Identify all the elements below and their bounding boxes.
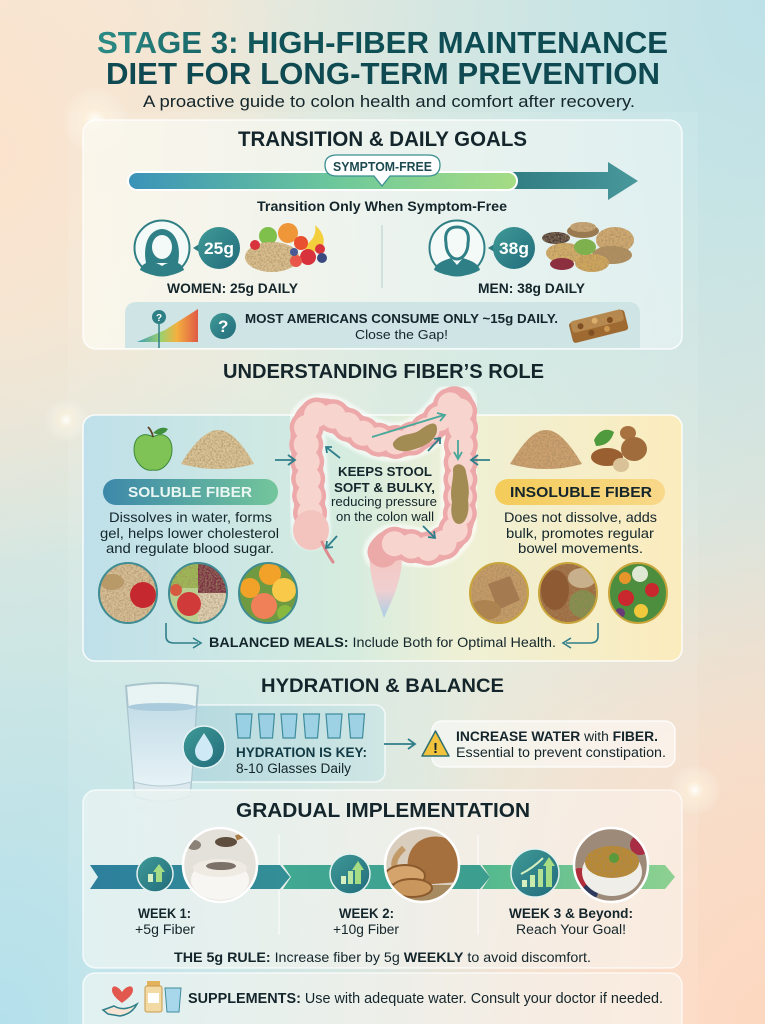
photo: vegetables (609, 563, 667, 623)
ribbon timeline (90, 865, 675, 889)
text: insoluble description: bowel movements. (518, 540, 643, 556)
text: week 2 (333, 906, 400, 937)
title: STAGE 3: HIGH-FIBER MAINTENANCE (97, 25, 668, 60)
title (97, 25, 668, 91)
food: nuts (591, 426, 647, 472)
pill: soluble fiber (103, 479, 278, 505)
text: balanced meals: BALANCED MEALS: Include Both for Optimal Health. (209, 634, 556, 650)
icon: supplement glass (165, 988, 181, 1012)
pill: insoluble fiber: INSOLUBLE FIBER (510, 484, 652, 501)
label: men: MEN: 38g DAILY (478, 281, 585, 296)
text: keeps stool soft (331, 464, 437, 524)
stool: transverse (393, 424, 437, 451)
heading: hydration: HYDRATION & BALANCE (261, 675, 504, 697)
panel: gradual implementation (83, 790, 682, 968)
progress arrow (128, 162, 638, 200)
text: keeps stool soft: reducing pressure (331, 494, 437, 509)
photo: bran and bread (469, 563, 528, 623)
icon: question (210, 313, 236, 339)
text: week 3: WEEK 3 & Beyond: (509, 906, 633, 921)
panel: hydration is key (180, 705, 385, 782)
icon: question: ? (218, 317, 228, 336)
text: hydration (236, 745, 367, 776)
icon: warning: ! (433, 740, 438, 757)
pill: insoluble fiber (495, 479, 665, 505)
pill: soluble fiber: SOLUBLE FIBER (128, 484, 252, 501)
photo: beans and fruit (169, 563, 227, 623)
text: insoluble description (504, 509, 657, 556)
photo: nuts and seeds (539, 563, 597, 623)
icons: six glasses (236, 714, 364, 738)
chart icon: gap: ? (156, 313, 162, 324)
icon: woman (134, 220, 190, 276)
text: increase water: INCREASE WATER with FIBER. (456, 729, 658, 744)
badge: 25g (193, 227, 240, 269)
icon: water glass (126, 683, 198, 816)
badge: 25g: 25g (204, 239, 234, 258)
badge: 38g: 38g (499, 239, 529, 258)
illustration: colon (275, 402, 490, 618)
text: week 3 (509, 906, 633, 937)
stool: descending (451, 464, 469, 524)
text: week 2: +10g Fiber (333, 922, 400, 937)
panel: fiber types (83, 415, 682, 661)
text: hydration: HYDRATION IS KEY: (236, 745, 367, 760)
callout: increase water (422, 721, 675, 767)
icon: bottle (145, 981, 162, 1012)
text: soluble description: gel, helps lower cholesterol (100, 525, 279, 541)
text: hydration: 8-10 Glasses Daily (236, 761, 351, 776)
arrow: hydration to warning (384, 739, 415, 749)
text: increase water (456, 729, 666, 760)
text: transition note: Transition Only When Symptom-Free (257, 199, 508, 214)
food: fruit and oats (245, 223, 327, 272)
text: keeps stool soft: KEEPS STOOL (338, 464, 432, 479)
photo: whole grain bread (385, 828, 460, 905)
heading: understanding fiber: UNDERSTANDING FIBER’S ROLE (223, 360, 544, 383)
food: wheat bran (510, 430, 582, 469)
text: week 1: +5g Fiber (135, 922, 196, 937)
subtitle: A proactive guide to colon health and comfort after recovery. (143, 92, 635, 111)
icon: hand and heart (103, 986, 137, 1016)
icon: week 2 growth (330, 854, 370, 894)
photo: citrus (239, 563, 297, 623)
photo: chia pudding (183, 828, 257, 902)
text: fiber gap (245, 311, 558, 342)
text: soluble description: Dissolves in water, forms (109, 509, 272, 525)
text: supplements: SUPPLEMENTS: Use with adequate water. Consult your doctor if needed. (188, 991, 663, 1007)
heading: transition: TRANSITION & DAILY GOALS (238, 128, 527, 151)
icon: warning (422, 731, 449, 757)
text: week 1: WEEK 1: (138, 906, 191, 921)
callout: fiber gap (125, 302, 640, 348)
text: week 2: WEEK 2: (339, 906, 394, 921)
badge: 38g (488, 227, 535, 269)
text: week 3: Reach Your Goal! (516, 922, 626, 937)
icon: water drop (183, 726, 225, 768)
arrows: pressure (275, 413, 490, 548)
callout: symptom-free (325, 155, 440, 186)
callout: symptom-free: SYMPTOM-FREE (333, 160, 432, 174)
arrow: balanced left (166, 623, 201, 648)
food: fiber bar (568, 308, 629, 343)
panel: transition and daily goals (83, 120, 682, 349)
text: fiber gap: MOST AMERICANS CONSUME ONLY ~15g DAILY. (245, 311, 558, 326)
heading: gradual: GRADUAL IMPLEMENTATION (236, 799, 530, 822)
icon: man (430, 220, 484, 276)
text: soluble description (100, 509, 279, 556)
text: keeps stool soft: on the colon wall (336, 509, 434, 524)
photo: oats and apple (99, 563, 157, 623)
text: keeps stool soft: SOFT & BULKY, (334, 480, 435, 495)
text: soluble description: and regulate blood sugar. (106, 540, 274, 556)
food: grains and legumes (542, 222, 634, 272)
label: women: WOMEN: 25g DAILY (167, 281, 298, 296)
icon: week 3 growth (511, 849, 559, 897)
arrow: balanced right (563, 623, 598, 648)
text: 5g rule: THE 5g RULE: Increase fiber by 5g WEEKLY to avoid discomfort. (174, 949, 591, 965)
text: week 1 (135, 906, 196, 937)
text: insoluble description: Does not dissolve, adds (504, 509, 657, 525)
text: insoluble description: bulk, promotes regular (506, 525, 654, 541)
icon: week 1 growth (137, 856, 173, 892)
chart icon: gap (137, 309, 198, 348)
text: fiber gap: Close the Gap! (355, 327, 448, 342)
title: DIET FOR LONG-TERM PREVENTION (106, 56, 660, 91)
food: oats (181, 430, 254, 469)
photo: lentil soup (568, 828, 650, 902)
panel: supplements (83, 973, 682, 1024)
text: increase water: Essential to prevent constipation. (456, 745, 666, 760)
food: apple (134, 427, 172, 470)
